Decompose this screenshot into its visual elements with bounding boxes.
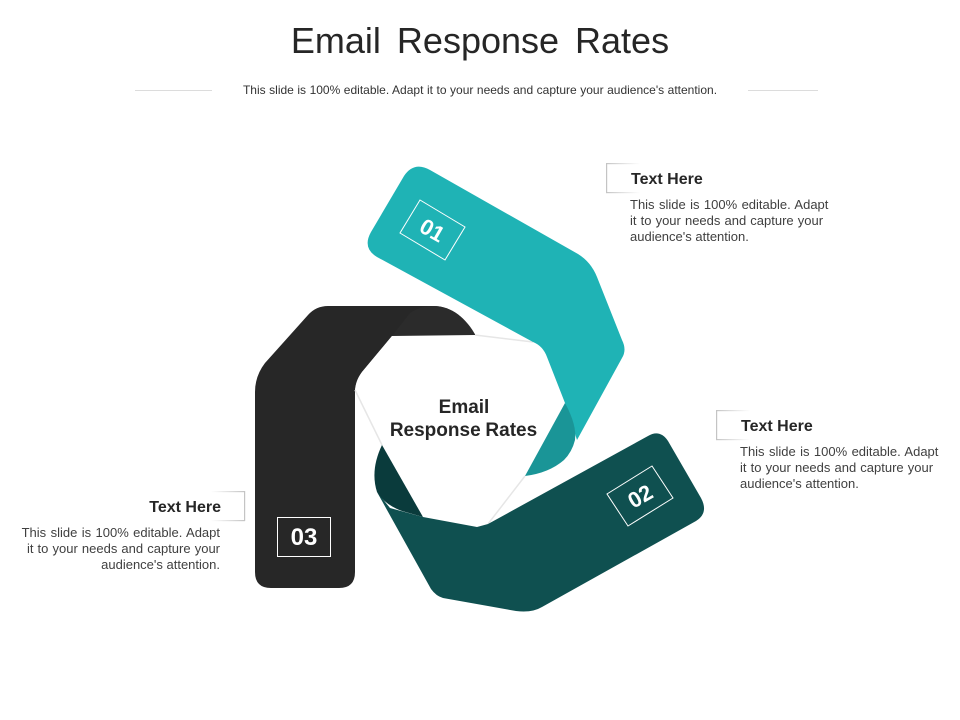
- callout 02: This slide is 100% editable. Adapt: [740, 444, 939, 459]
- callout 02: [716, 410, 939, 491]
- center label: [390, 397, 537, 441]
- callout 01: This slide is 100% editable. Adapt: [630, 197, 829, 212]
- segment 03: black band: [255, 306, 478, 588]
- callout 03: This slide is 100% editable. Adapt: [22, 525, 220, 540]
- segment 01: teal band: [368, 167, 624, 476]
- segment 02: dark green band: [374, 433, 704, 612]
- callout 02: it to your needs and capture your: [740, 460, 934, 475]
- number box 01: 01: [415, 213, 449, 247]
- number box 02: 02: [623, 479, 657, 513]
- callout 01: [606, 163, 829, 244]
- number box 03: 03: [291, 524, 317, 551]
- callout 03: it to your needs and capture your: [27, 541, 221, 556]
- number box 03: [278, 518, 330, 556]
- callout 02: Text Here: [741, 418, 813, 435]
- callout 01: Text Here: [631, 171, 703, 188]
- number box 02: [607, 466, 673, 526]
- subtitle: This slide is 100% editable. Adapt it to your needs and capture your audience's attention.: [243, 83, 717, 97]
- center label: Response Rates: [390, 420, 537, 441]
- central hexagon: [355, 335, 565, 527]
- callout 03: Text Here: [149, 499, 221, 516]
- number box 01: [400, 200, 465, 260]
- callout 03: [22, 491, 245, 572]
- callout 01: it to your needs and capture your: [630, 213, 824, 228]
- center label: Email: [439, 397, 489, 418]
- title: Email Response Rates: [291, 20, 669, 61]
- callout 02: audience's attention.: [740, 476, 859, 491]
- callout 01: audience's attention.: [630, 229, 749, 244]
- callout 03: audience's attention.: [101, 557, 220, 572]
